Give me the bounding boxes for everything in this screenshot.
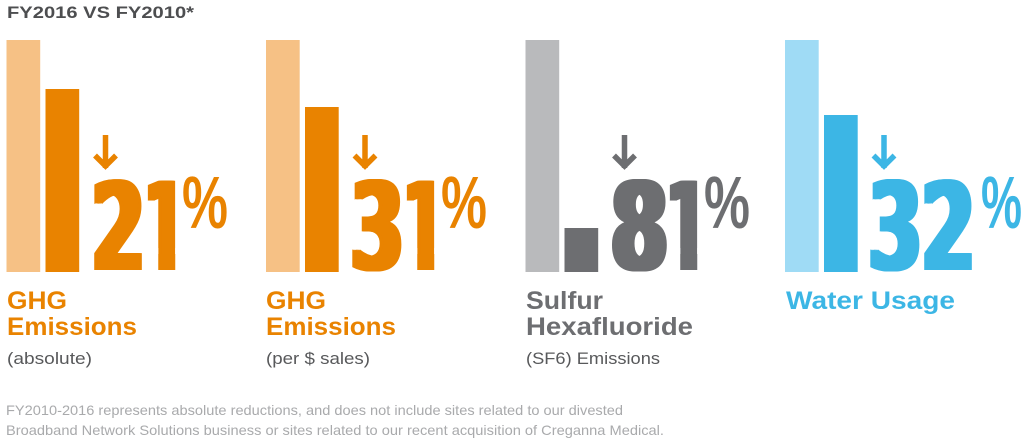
value: 32 (864, 170, 978, 275)
panel: water usage (785, 40, 1022, 315)
bar: FY2010 baseline (266, 40, 300, 272)
value: 81 (612, 179, 698, 272)
label: Emissions (7, 313, 137, 341)
label: GHG (266, 287, 326, 315)
icon: down arrow (95, 135, 116, 168)
percent sign: % (182, 161, 228, 244)
bar: FY2016 (305, 107, 339, 272)
panel: sulfur hexafluoride (526, 40, 750, 368)
sublabel: (absolute) (7, 350, 92, 368)
label: GHG (7, 287, 67, 315)
bar: FY2016 (824, 115, 858, 272)
sublabel: (SF6) Emissions (526, 350, 660, 368)
label: Sulfur (526, 287, 603, 315)
sublabel: (per $ sales) (266, 350, 370, 368)
bar: FY2016 (564, 228, 598, 272)
value: 21 (94, 179, 176, 270)
panel: GHG emissions absolute (6, 40, 228, 368)
value: 31 (352, 179, 434, 272)
bar: FY2010 baseline (526, 40, 559, 272)
icon: down arrow (614, 135, 635, 168)
footnote: Broadband Network Solutions business or sites related to our recent acquisition of Creganna Medical. (6, 422, 664, 438)
title: FY2016 VS FY2010* (7, 4, 195, 22)
bar: FY2016 (46, 89, 79, 272)
bar: FY2010 baseline (6, 40, 40, 272)
bar: FY2010 baseline (785, 40, 819, 272)
label: Water Usage (786, 287, 955, 315)
panel: GHG emissions per sales (266, 40, 487, 368)
footnote: FY2010-2016 represents absolute reductions, and does not include sites related to our divested (6, 402, 623, 418)
percent sign: % (704, 161, 750, 244)
icon: down arrow (874, 135, 894, 168)
label: Hexafluoride (526, 313, 693, 341)
percent sign: % (441, 161, 487, 244)
icon: down arrow (354, 135, 376, 168)
label: Emissions (266, 313, 396, 341)
